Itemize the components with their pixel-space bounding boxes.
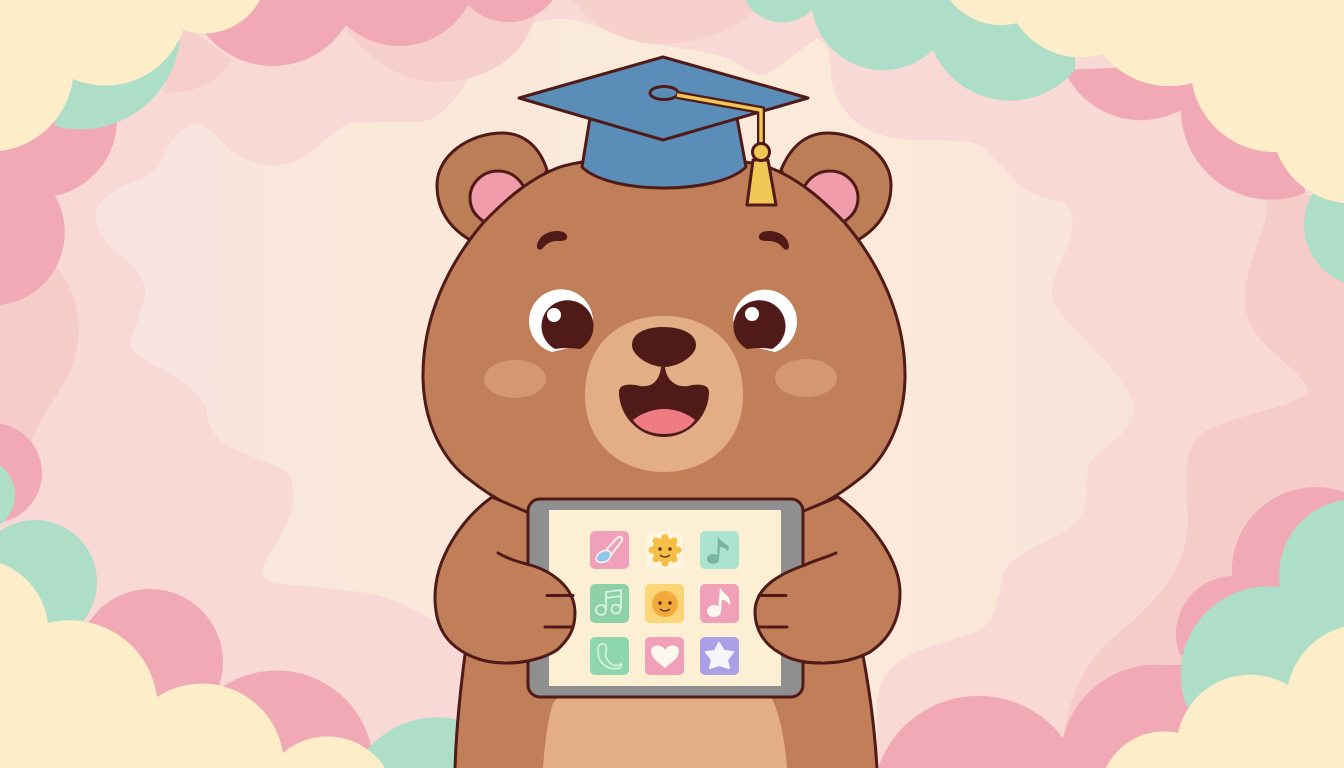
- tongue: [633, 409, 695, 434]
- bear face: [484, 231, 837, 472]
- tassel cord: [677, 95, 761, 145]
- tablet screen: [549, 510, 781, 686]
- app icon: outlined music notes: [590, 584, 629, 623]
- tablet: [528, 499, 803, 697]
- clouds: top right: [745, 0, 1344, 286]
- app icon: white music note: [700, 584, 739, 623]
- bear head: [423, 159, 905, 512]
- left eye: [529, 289, 594, 352]
- muzzle: [585, 316, 743, 472]
- eyebrows: [537, 231, 789, 250]
- app icon: sun: [646, 532, 683, 569]
- right ear: [781, 133, 891, 240]
- app icon: music note: [700, 531, 739, 569]
- belly: [543, 690, 787, 768]
- app icon: smiley: [645, 584, 684, 623]
- clouds: bottom right: [878, 487, 1344, 768]
- clouds: top left: [0, 0, 553, 305]
- bear body: [455, 640, 877, 768]
- right hand: [755, 553, 860, 663]
- app icon: star: [700, 637, 739, 675]
- left arm: [435, 497, 560, 663]
- app icon: heart: [645, 637, 684, 675]
- right arm: [770, 497, 900, 663]
- tassel: [747, 160, 776, 205]
- right eye: [733, 290, 797, 352]
- cap button: [650, 86, 678, 100]
- clouds: bottom left: [0, 423, 460, 768]
- tassel knot: [752, 144, 770, 160]
- mouth: [619, 367, 709, 437]
- app icon: paintbrush: [590, 531, 629, 569]
- cheeks: [484, 360, 546, 398]
- left hand: [470, 553, 575, 663]
- left ear: [437, 133, 547, 240]
- cap board: [519, 57, 808, 140]
- app icon: phone: [590, 637, 629, 675]
- graduation cap: [519, 57, 808, 205]
- cap base: [582, 118, 746, 188]
- nose: [632, 327, 696, 367]
